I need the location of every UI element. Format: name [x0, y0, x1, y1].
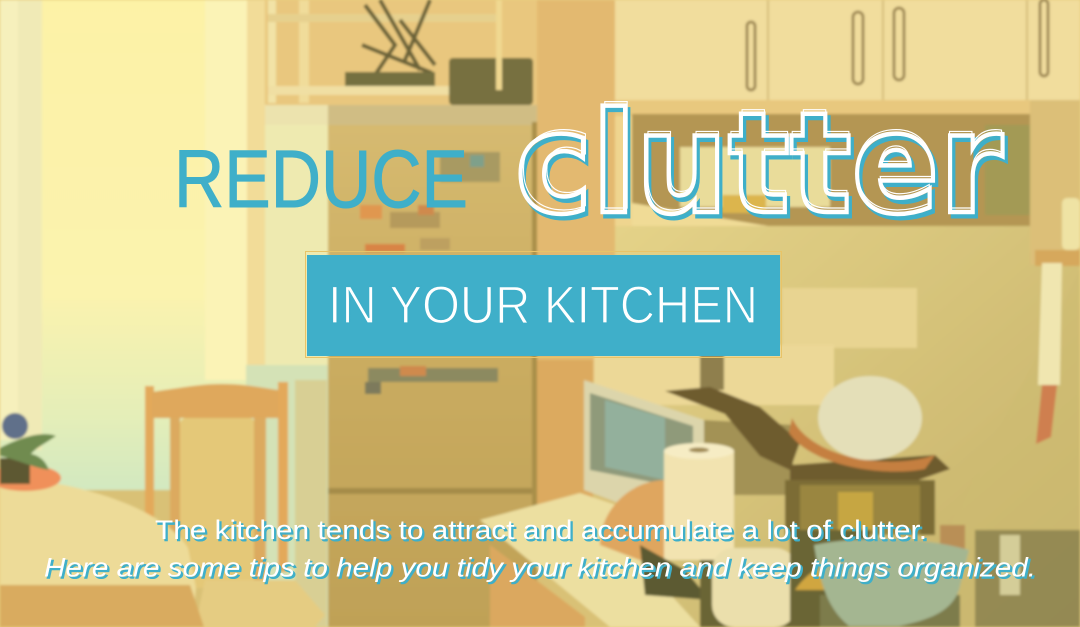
window and curtain	[0, 0, 540, 627]
banner: in your kitchen: IN YOUR KITCHEN	[328, 276, 758, 335]
boxes	[594, 288, 917, 405]
intro text line 1: The kitchen tends to attract and accumulate a lot of clutter.	[157, 517, 929, 547]
counter clutter	[640, 525, 1080, 627]
shelf with electronics	[268, 0, 533, 105]
intro text line 2: Here are some tips to help you tidy your kitchen and keep things organized.	[46, 554, 1038, 584]
heading: clutter outlined: clutter	[518, 79, 1002, 242]
refrigerator	[265, 105, 537, 627]
heading: clutter outlined: clutter	[515, 83, 1003, 246]
wall cabinets	[615, 0, 1080, 116]
heading: clutter outlined: clutter	[518, 87, 1006, 250]
wall strip beside fridge	[537, 0, 617, 380]
mixing bowl	[814, 539, 969, 626]
intro text line 2: Here are some tips to help you tidy your kitchen and keep things organized.	[44, 552, 1036, 582]
table	[0, 478, 196, 627]
knife	[1036, 263, 1062, 444]
plant	[0, 465, 61, 491]
heading: reduce: REDUCE	[174, 134, 468, 225]
under-cabinet alcove	[615, 114, 1032, 231]
pans and bowl	[665, 376, 950, 535]
paper towel roll	[664, 443, 734, 560]
magnets	[360, 152, 500, 394]
countertop	[480, 480, 700, 627]
microwave	[584, 380, 793, 520]
banner: in your kitchen	[306, 252, 782, 358]
right wall and backsplash	[615, 226, 1080, 627]
table, chair and plant	[0, 382, 325, 627]
intro text line 1: The kitchen tends to attract and accumulate a lot of clutter.	[155, 515, 927, 545]
